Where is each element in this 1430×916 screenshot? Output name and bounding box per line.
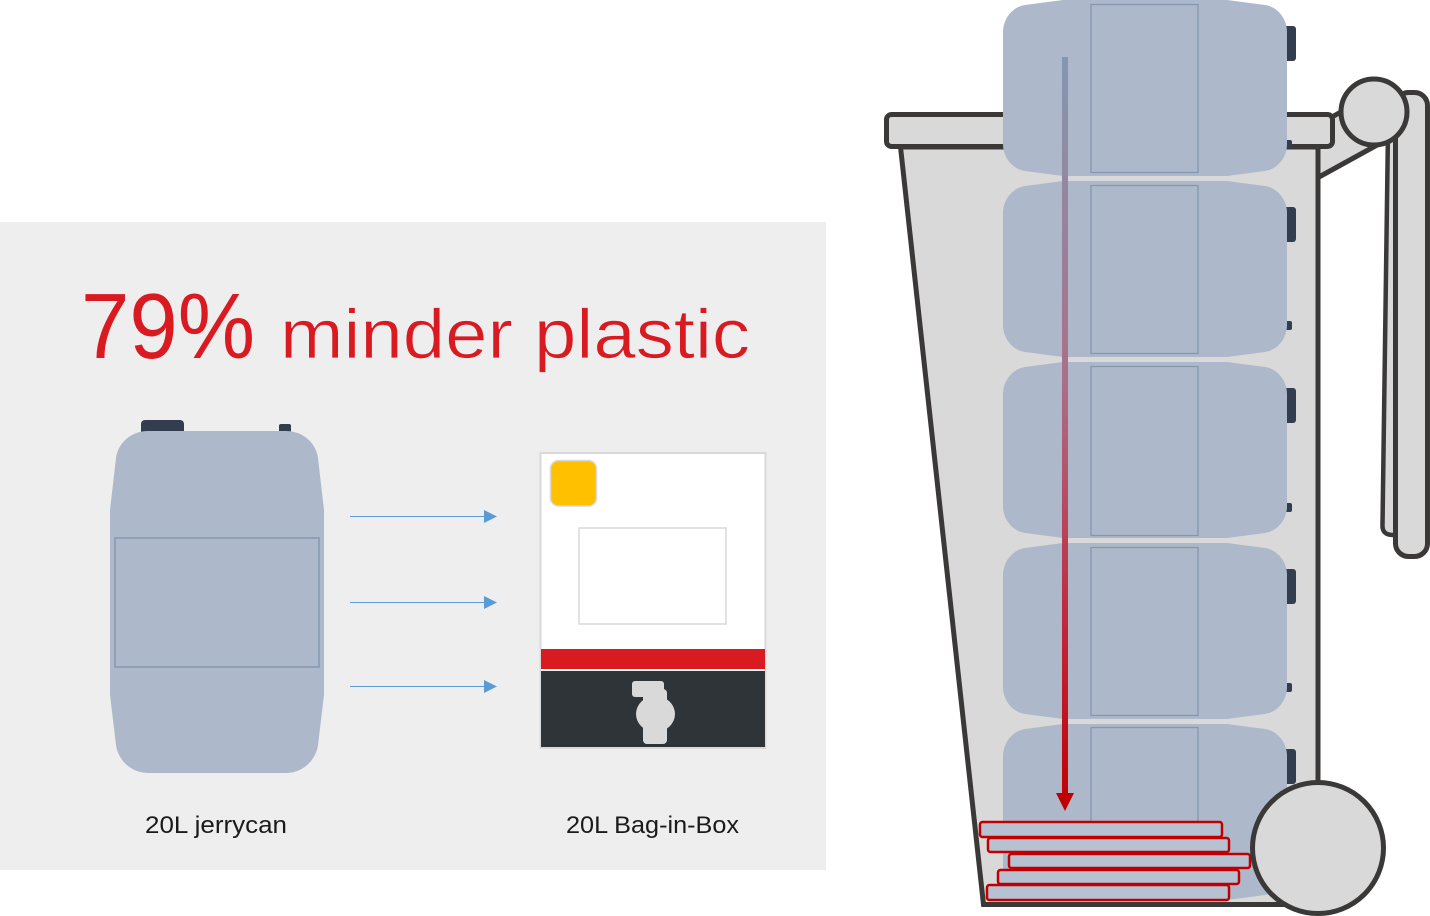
label: 20L jerrycan: 20L jerrycan bbox=[145, 812, 287, 839]
stack: jerrycan 1 in bin bbox=[1003, 0, 1296, 176]
icon: large wheel bbox=[1252, 782, 1384, 914]
stack: flattened bag-in-box packs bbox=[980, 822, 1250, 900]
icon: handle hinge bbox=[1341, 79, 1407, 145]
trolley bin: handle, body and rim bbox=[886, 92, 1428, 904]
arrow: middle bbox=[350, 596, 497, 609]
stack: jerrycan 2 in bin bbox=[1003, 181, 1296, 357]
label: 20L Bag-in-Box: 20L Bag-in-Box bbox=[566, 812, 739, 839]
stack: jerrycan 4 in bin bbox=[1003, 543, 1296, 719]
icon: 20L jerrycan bbox=[110, 420, 324, 773]
stack: jerrycan 3 in bin bbox=[1003, 362, 1296, 538]
title: 79% minder plastic bbox=[81, 274, 750, 378]
title: 79% minder plastic: 79% bbox=[81, 274, 255, 378]
title: 79% minder plastic: minder plastic bbox=[280, 295, 750, 373]
arrow: top bbox=[350, 510, 497, 523]
arrow: volume reduction bbox=[1056, 57, 1074, 811]
icon: 20L Bag-in-Box bbox=[540, 453, 766, 748]
stack: jerrycan 5 in bin bbox=[1003, 724, 1296, 900]
arrow: bottom bbox=[350, 680, 497, 693]
panel: comparison background bbox=[0, 222, 826, 870]
